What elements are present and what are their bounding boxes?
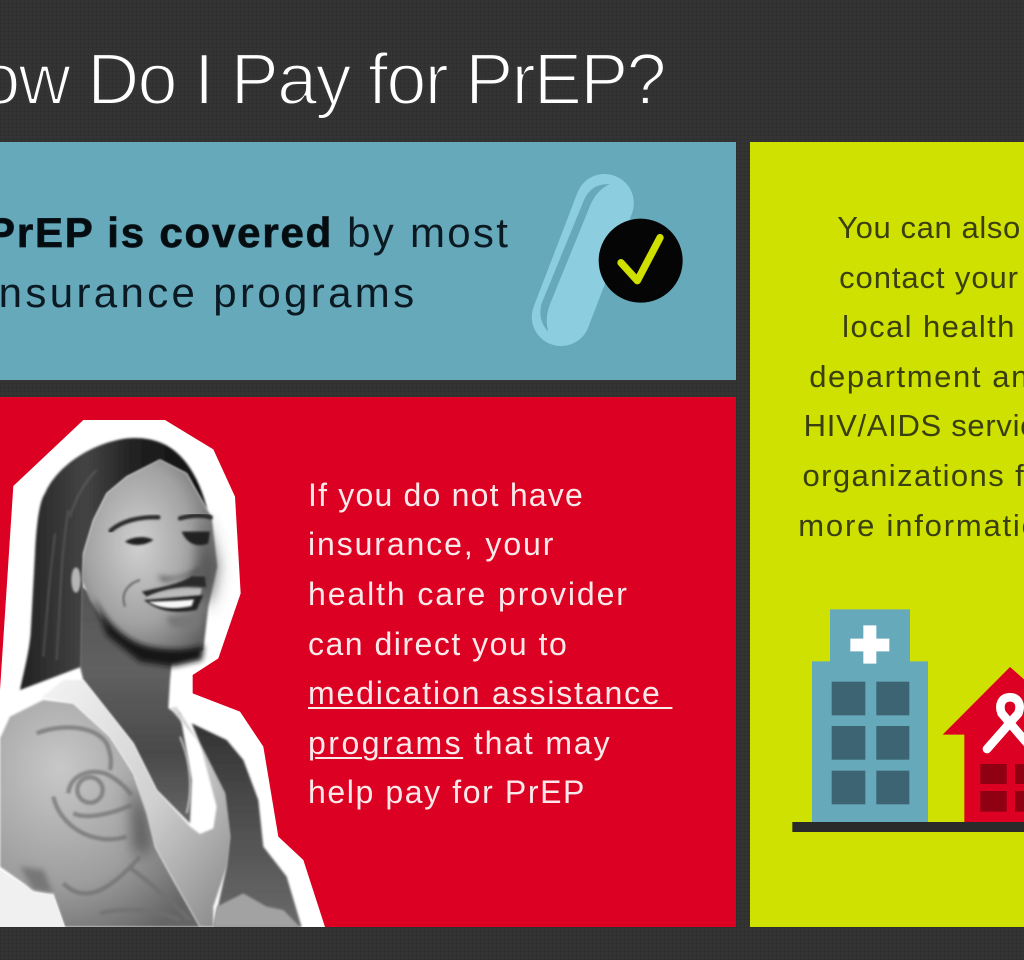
mouth xyxy=(144,595,203,612)
nose shadow xyxy=(157,563,202,582)
forearm xyxy=(213,893,300,927)
right arm xyxy=(192,723,302,927)
photo: smiling man cut-out xyxy=(0,420,325,927)
text: no-insurance message xyxy=(308,477,672,810)
panel: no insurance xyxy=(0,397,736,927)
lower left white area xyxy=(0,870,65,927)
hair xyxy=(20,438,207,690)
ear xyxy=(71,567,81,593)
text: no-insurance message: health care provider xyxy=(308,576,629,612)
tattoo xyxy=(37,727,190,920)
arm inner shadow xyxy=(132,780,150,853)
text: no-insurance message: If you do not have xyxy=(308,477,584,513)
text: contact local health department: contact your xyxy=(839,260,1019,295)
text: PrEP is covered by most insurance programs xyxy=(0,209,510,316)
text: contact local health department: local health xyxy=(842,309,1016,344)
hospital xyxy=(812,609,928,822)
text: contact local health department xyxy=(798,210,1024,543)
text: contact local health department: You can also xyxy=(837,210,1021,245)
panel: insurance coverage xyxy=(0,142,736,380)
text: PrEP is covered by most insurance programs: PrEP is covered by most xyxy=(0,209,510,256)
left shoulder and arm xyxy=(0,700,200,927)
text: no-insurance message: can direct you to xyxy=(308,626,568,662)
brows and eyes xyxy=(111,516,211,531)
text: no-insurance message: programs that may xyxy=(308,725,611,761)
panel: local resources xyxy=(750,142,1024,927)
smile crease xyxy=(124,580,140,607)
house xyxy=(943,667,1024,822)
face xyxy=(82,459,217,667)
mustache xyxy=(142,576,206,597)
text: no-insurance message: insurance, your xyxy=(308,526,555,562)
ground line xyxy=(792,822,1024,832)
ribbon xyxy=(987,697,1024,749)
right face shadow xyxy=(197,517,217,607)
singlet xyxy=(42,680,230,927)
lower lip shadow xyxy=(167,613,200,630)
beard xyxy=(93,597,204,667)
torso xyxy=(0,680,302,927)
icon: pill with check mark xyxy=(532,174,683,346)
armpit crease xyxy=(20,867,53,893)
teeth xyxy=(148,599,194,608)
icon: hospital and HIV service buildings xyxy=(792,609,1024,832)
upper lip xyxy=(147,588,202,602)
neck xyxy=(80,587,192,823)
necklace xyxy=(180,737,190,813)
text: no-insurance message: medication assistance xyxy=(308,675,662,711)
text: no-insurance message: help pay for PrEP xyxy=(308,774,586,810)
white outline xyxy=(0,420,325,927)
